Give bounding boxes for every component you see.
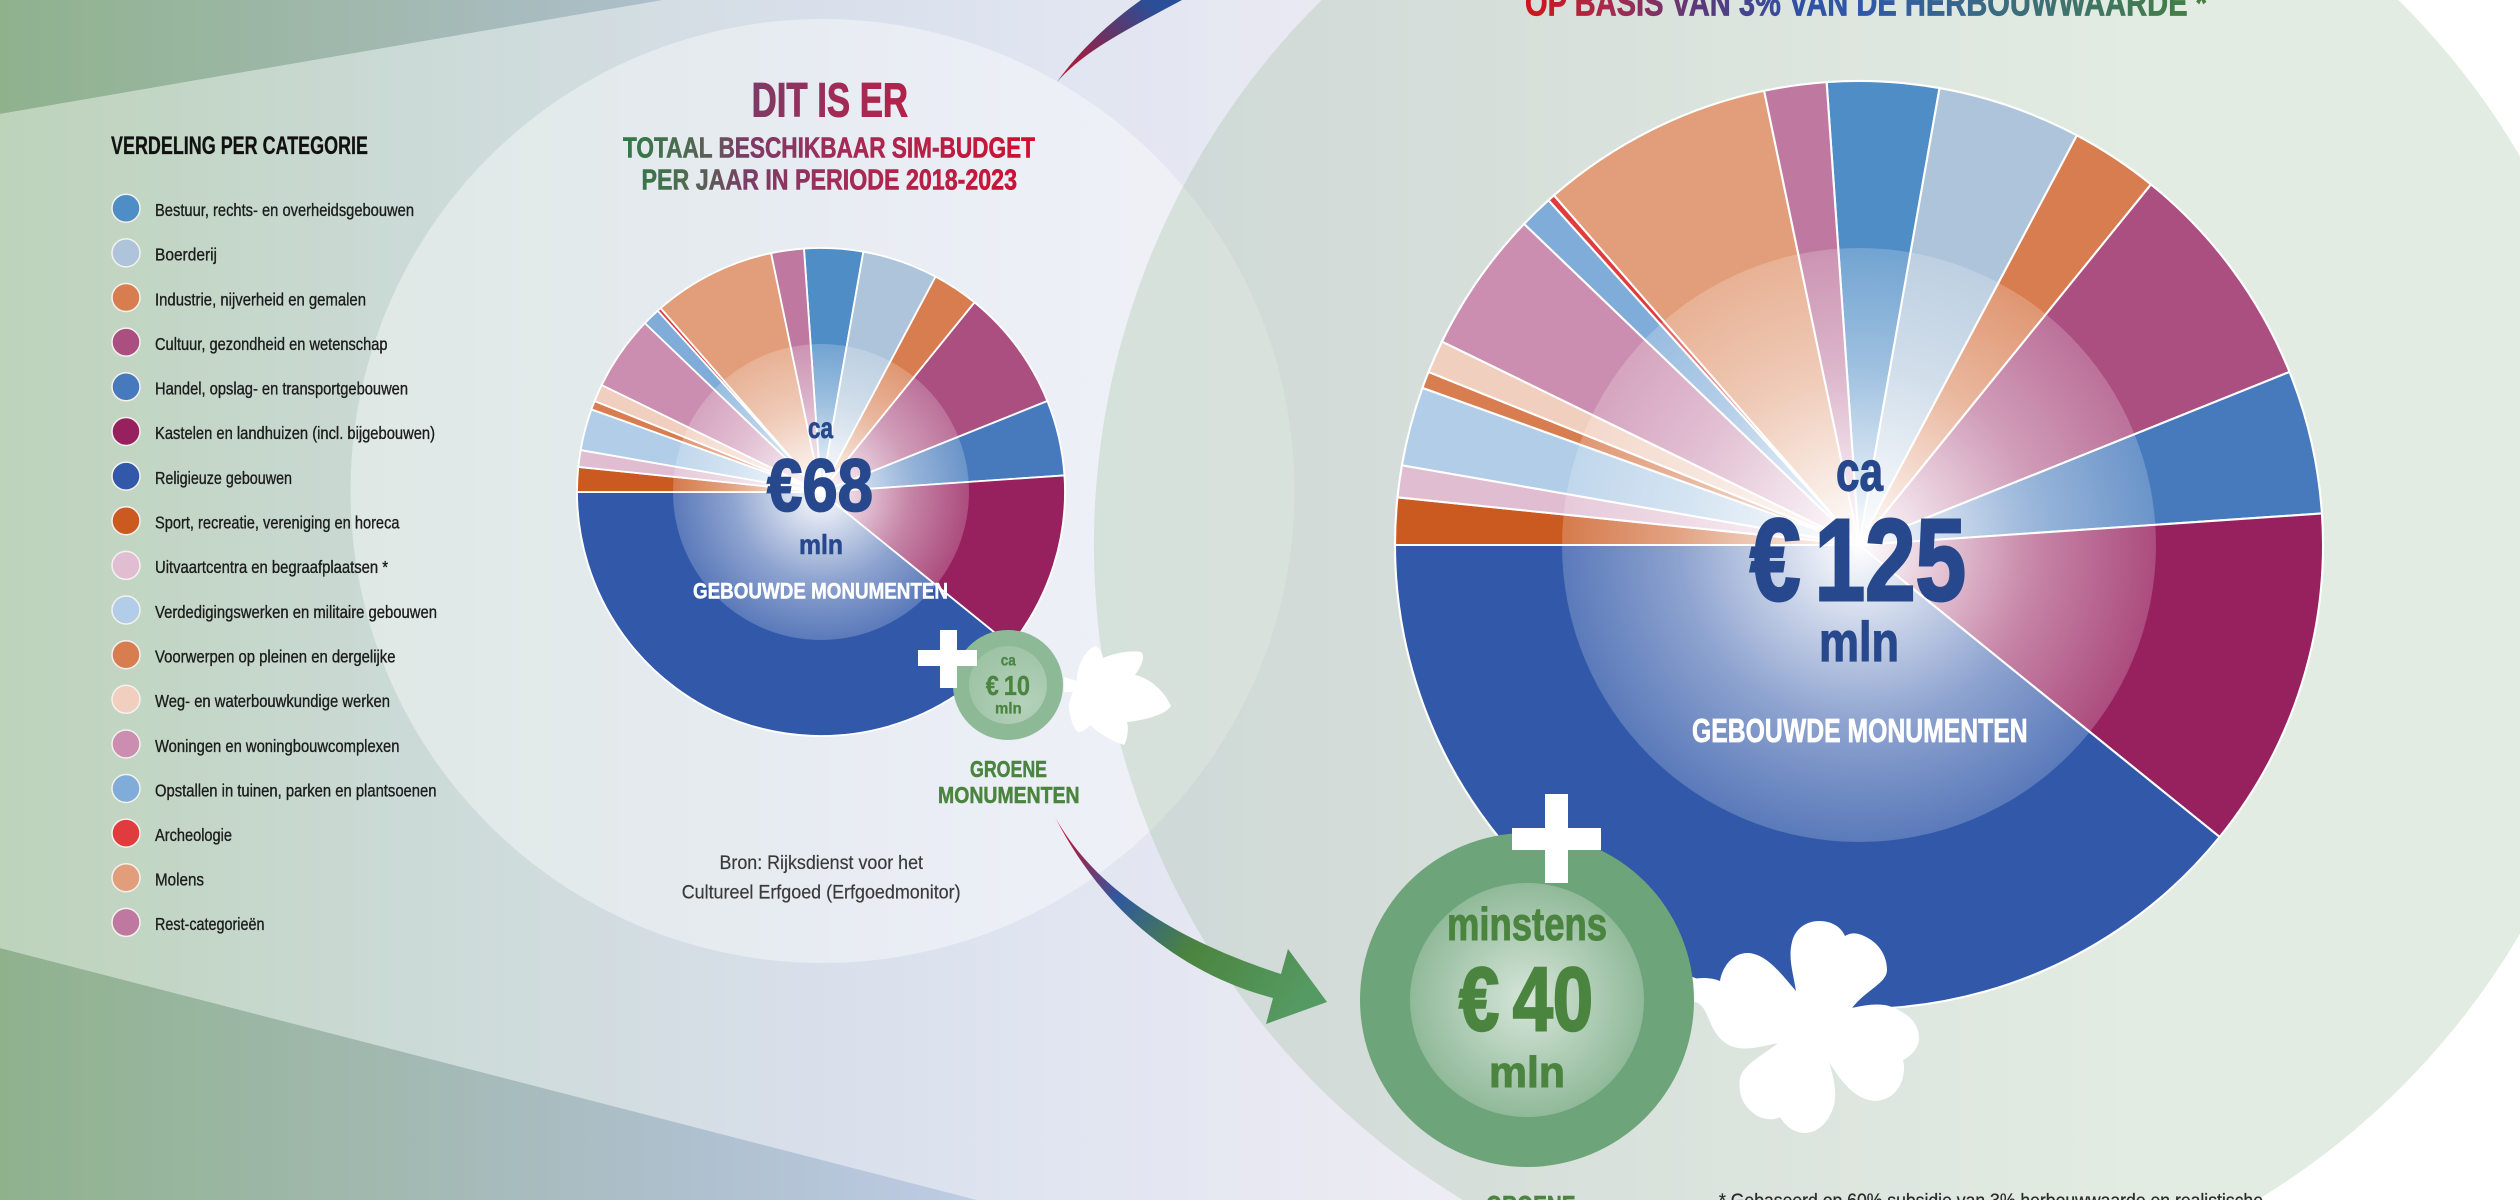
small green circle xyxy=(953,630,1063,740)
legend item: Archeologie: Archeologie xyxy=(155,825,232,845)
legend item: Uitvaartcentra: Uitvaartcentra en begraafplaatsen * xyxy=(155,557,388,577)
legend item: Woningen xyxy=(112,730,400,758)
heading: subtitle totaal beschikbaar: PER JAAR IN PERIODE 2018-2023 xyxy=(642,164,1017,196)
legend item: Verdedigingswerken: Verdedigingswerken en militaire gebouwen xyxy=(155,602,437,622)
legend item: Weg- en waterbouw: Weg- en waterbouwkundige werken xyxy=(155,691,390,711)
legend item: Weg- en waterbouw xyxy=(112,685,390,713)
chart: small pie xyxy=(577,248,1065,736)
legend item: Archeologie xyxy=(112,819,232,847)
legend item: Molens xyxy=(112,864,204,892)
large green circle xyxy=(1360,833,1694,1167)
background: top-left wedge xyxy=(0,0,663,114)
legend item: Cultuur: Cultuur, gezondheid en wetenschap xyxy=(155,334,388,354)
heading: subtitle totaal beschikbaar: TOTAAL BESCHIKBAAR SIM-BUDGET xyxy=(623,133,1035,165)
legend item: Industrie xyxy=(112,284,366,312)
legend title: VERDELING PER CATEGORIE xyxy=(111,132,368,160)
legend item: Molens: Molens xyxy=(155,870,204,890)
legend item: Rest-categorieen: Rest-categorieën xyxy=(155,914,264,934)
legend item: Opstallen xyxy=(112,774,436,802)
large pie amount: € 125 xyxy=(1750,495,1966,625)
small pie amount: €68 xyxy=(767,444,873,527)
large green circle: mln xyxy=(1489,1048,1565,1097)
large pie label: GEBOUWDE MONUMENTEN xyxy=(1692,712,2028,749)
background: bottom-left wedge xyxy=(0,948,977,1200)
legend item: Voorwerpen: Voorwerpen op pleinen en dergelijke xyxy=(155,646,396,666)
legend item: Woningen: Woningen en woningbouwcomplexen xyxy=(155,736,400,756)
legend item: Uitvaartcentra xyxy=(112,551,388,579)
legend item: Bestuur xyxy=(112,194,414,222)
small pie amount xyxy=(767,412,873,560)
heading: DIT IS ER: DIT IS ER xyxy=(752,75,908,128)
icon: small clover xyxy=(1064,646,1171,745)
legend item: Boerderij xyxy=(112,239,217,267)
large pie amount: ca xyxy=(1836,440,1884,503)
panel: large circle backdrop xyxy=(1094,0,2520,1200)
source note: Bron: Rijksdienst voor het xyxy=(720,853,924,874)
legend item: Rest-categorieen xyxy=(112,908,264,936)
icon: large plus xyxy=(1512,794,1601,883)
legend item: Voorwerpen xyxy=(112,641,396,669)
chart: large pie xyxy=(1395,81,2323,1009)
legend item: Opstallen: Opstallen in tuinen, parken en plantsoenen xyxy=(155,780,436,800)
panel: small circle backdrop xyxy=(350,19,1294,963)
arrow: bottom curved arrow xyxy=(1055,817,1327,1024)
legend item: Sport: Sport, recreatie, vereniging en horeca xyxy=(155,512,400,532)
legend item: Verdedigingswerken xyxy=(112,596,437,624)
legend item: Bestuur: Bestuur, rechts- en overheidsgebouwen xyxy=(155,200,414,220)
label: groene monumenten small xyxy=(938,756,1080,808)
legend item: Handel xyxy=(112,373,408,401)
legend item: Boerderij: Boerderij xyxy=(155,245,217,265)
source note: Cultureel Erfgoed (Erfgoedmonitor) xyxy=(682,882,961,904)
legend item: Industrie: Industrie, nijverheid en gemalen xyxy=(155,289,366,309)
icon: small plus xyxy=(918,630,977,688)
large pie inner glow xyxy=(1562,248,2156,842)
source note xyxy=(682,853,961,904)
legend xyxy=(111,132,437,936)
small green circle: mln xyxy=(995,701,1022,718)
small pie amount: mln xyxy=(799,529,843,560)
legend item: Kastelen: Kastelen en landhuizen (incl. bijgebouwen) xyxy=(155,423,435,443)
small green circle: € 10 xyxy=(986,670,1030,701)
large pie amount: mln xyxy=(1819,610,1899,673)
label: groene monumenten small: GROENE xyxy=(970,756,1047,782)
legend item: Cultuur xyxy=(112,328,388,356)
icon: large clover xyxy=(1680,921,1919,1133)
legend item: Religieuze: Religieuze gebouwen xyxy=(155,468,292,488)
heading: subtitle totaal beschikbaar xyxy=(623,133,1035,196)
large green circle: € 40 xyxy=(1459,950,1593,1050)
legend item: Kastelen xyxy=(112,417,435,445)
small green circle: ca xyxy=(1001,653,1016,670)
arrow: top curved arrow xyxy=(1057,0,1182,82)
label: groene monumenten small: MONUMENTEN xyxy=(938,782,1080,808)
large green circle: minstens xyxy=(1447,898,1607,950)
legend item: Handel: Handel, opslag- en transportgebouwen xyxy=(155,379,408,399)
large pie amount xyxy=(1750,440,1966,673)
small pie inner glow xyxy=(673,344,969,640)
small pie amount: ca xyxy=(808,412,833,445)
legend item: Sport xyxy=(112,507,400,535)
small pie label: GEBOUWDE MONUMENTEN xyxy=(693,579,948,604)
legend item: Religieuze xyxy=(112,462,292,490)
